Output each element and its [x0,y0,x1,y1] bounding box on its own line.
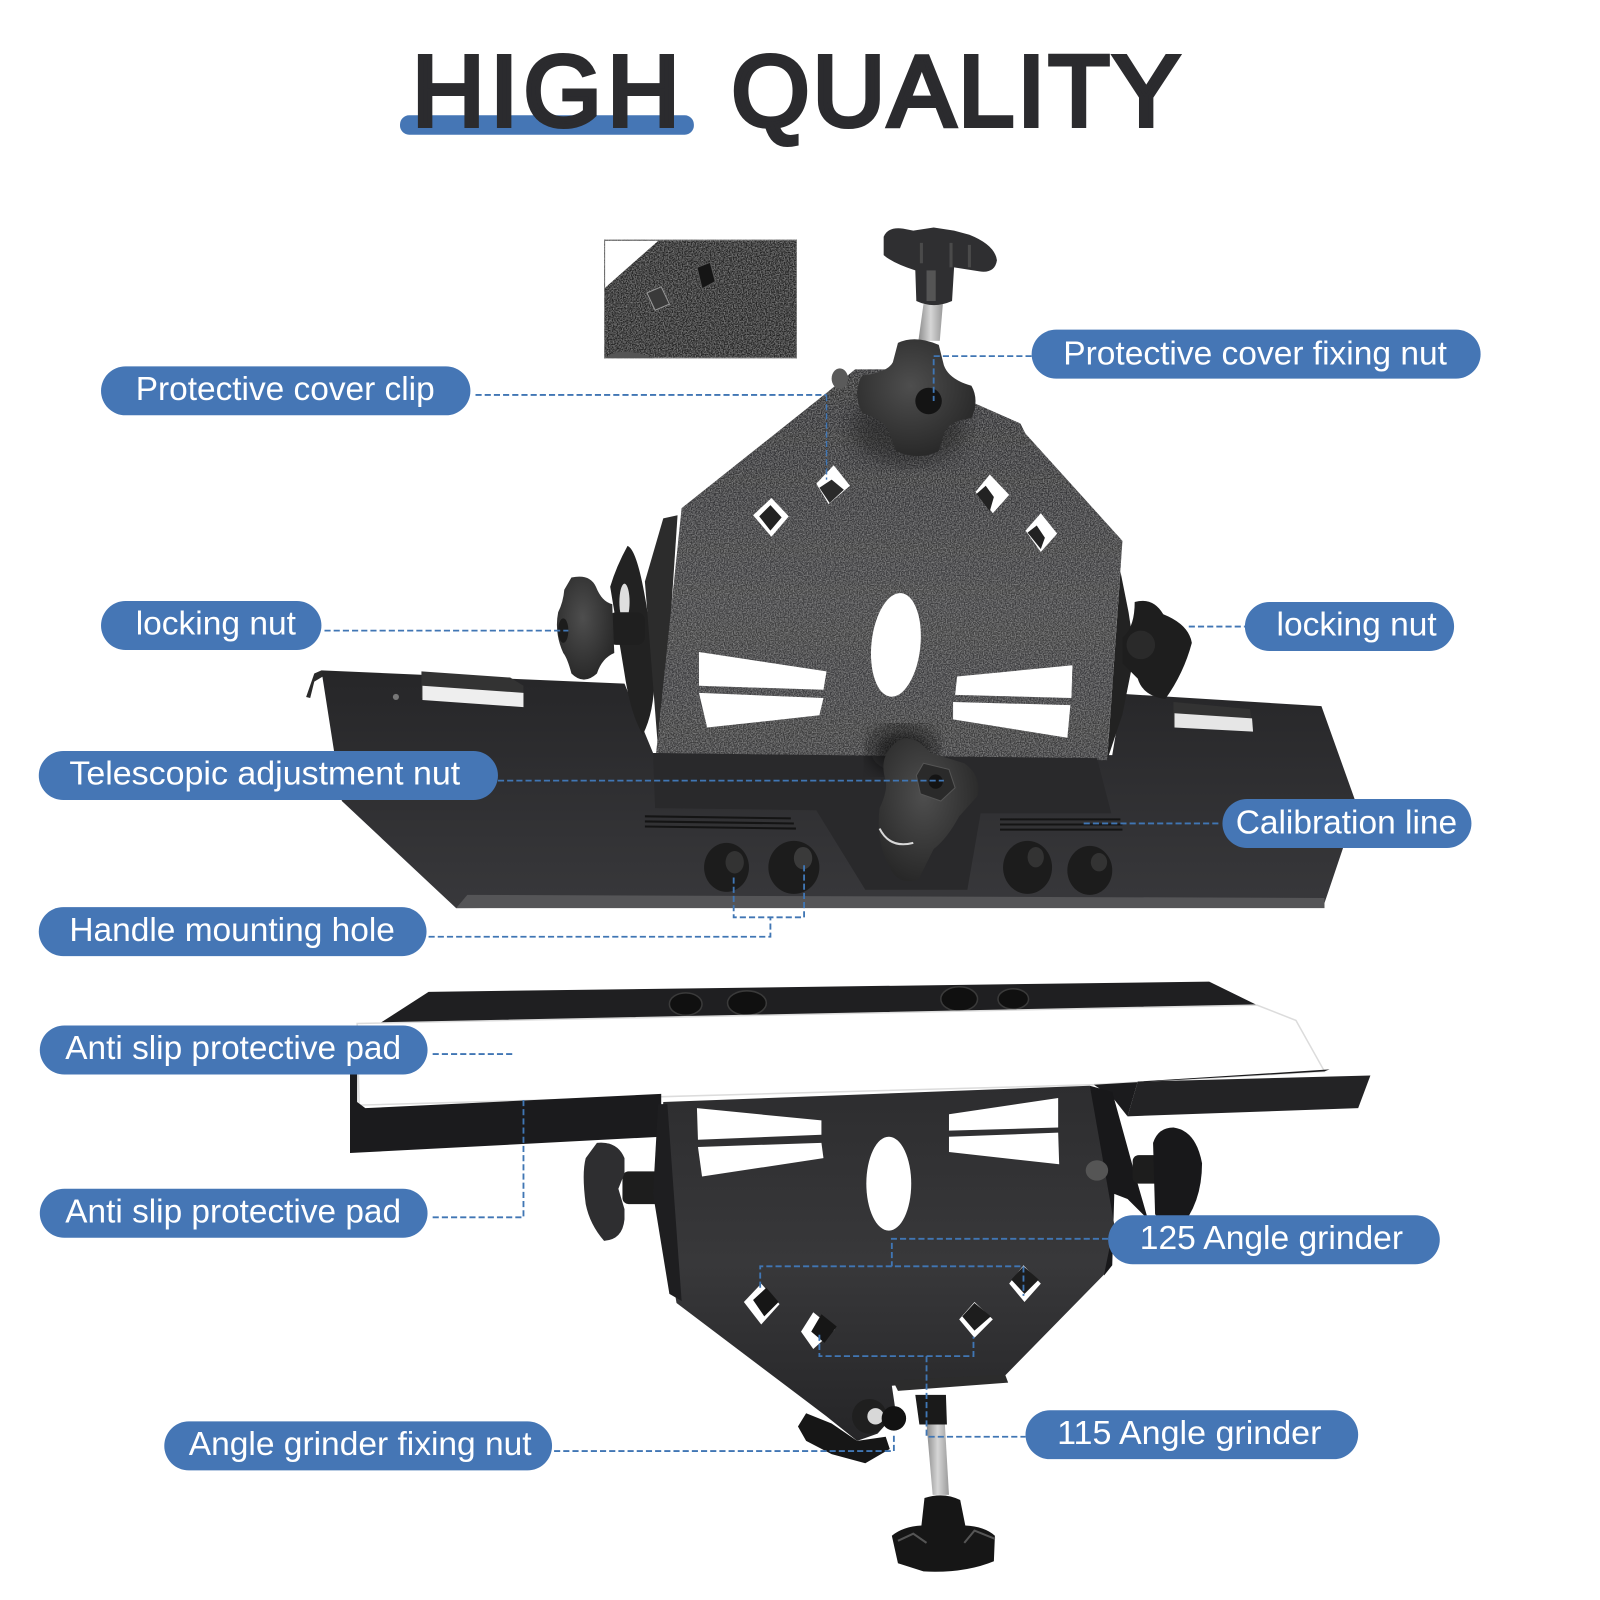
right side bracket [1107,571,1135,760]
leader lines [324,356,1245,1451]
knob: locking right [1122,601,1192,699]
label: Calibration line [1222,799,1471,848]
leader: clip drop [826,395,828,480]
label: Telescopic adjustment nut [39,751,498,800]
lower plate left flange [653,1104,682,1301]
shadow under top knob [852,393,964,464]
bottom lip bar [893,1374,1008,1391]
leader: calibration line [1084,822,1221,824]
calibration lines [645,816,1122,830]
product: lower view assembly [350,982,1370,1572]
label: 115 Angle grinder: 115 Angle grinder [1057,1415,1321,1452]
leader: anti slip pad lower [433,1100,523,1217]
label: 115 Angle grinder [1026,1410,1358,1459]
top screw shaft [918,304,943,341]
knob: angle grinder fixing [798,1399,906,1463]
label: 125 Angle grinder [1108,1215,1440,1264]
handle bolts [704,841,1112,895]
leader: protective cover fixing nut [934,356,1032,401]
knob: locking left [557,577,645,680]
plate slots [699,591,1072,738]
title [400,36,1180,148]
label: Anti slip protective pad upper [40,1026,428,1074]
leader: angle grinder fixing nut [554,1434,894,1451]
label: locking nut left: locking nut [136,606,297,643]
knob: top T-handle [884,228,997,305]
base tray [306,670,1357,908]
title underline bar [400,115,694,135]
leader: locking nut left [324,630,568,632]
tray edge left [350,1061,661,1153]
product: upper view assembly [306,228,1357,908]
tray back band [380,982,1257,1023]
label: locking nut right: locking nut [1277,607,1437,644]
lower plate clip holes [744,1265,1041,1349]
right bolt [1086,1160,1108,1181]
label: Protective cover fixing nut [1032,330,1481,379]
leader: handle mounting hole [429,862,804,937]
mounting plate [656,369,1122,760]
small peg [832,368,848,389]
slider plate [653,753,1111,890]
label: Protective cover clip [101,366,470,415]
lower plate slots [697,1098,1059,1231]
plate clip holes [753,465,1057,552]
label: Angle grinder fixing nut [164,1421,552,1470]
label: locking nut right [1245,602,1454,651]
label: Anti slip protective pad upper: Anti slip protective pad [65,1030,401,1067]
label: Anti slip protective pad lower: Anti slip protective pad [65,1193,401,1230]
left side bracket [610,515,678,750]
leader: 125 angle grinder [760,1239,1108,1296]
tray lip right [1128,1076,1370,1116]
right bracket [1090,1086,1148,1276]
label: Handle mounting hole [39,907,427,956]
label: Telescopic adjustment nut: Telescopic adjustment nut [69,756,461,793]
leader: telescopic adjustment nut [498,780,944,782]
lower screw collar [915,1395,947,1424]
label: locking nut left [101,601,321,650]
leader: locking nut right [1189,626,1245,628]
label: Protective cover clip: Protective cover clip [136,371,435,408]
title word: HIGH: HIGH [412,36,680,148]
right knob [1133,1128,1202,1230]
title word: QUALITY: QUALITY [732,36,1180,148]
label: 125 Angle grinder: 125 Angle grinder [1140,1220,1403,1257]
leader: anti slip pad upper [433,1053,513,1055]
rivets [669,987,1029,1015]
label: Protective cover fixing nut: Protective cover fixing nut [1063,335,1448,372]
label: Angle grinder fixing nut: Angle grinder fixing nut [189,1426,532,1463]
knob: telescopic adjustment [870,728,978,881]
left bolt and knob [584,1143,714,1241]
tray edge right [1094,1069,1330,1116]
lower plate [658,1086,1114,1441]
lower T-handle knob [892,1495,995,1572]
label: Anti slip protective pad lower [40,1189,428,1238]
label: Calibration line: Calibration line [1236,805,1457,842]
label: Handle mounting hole: Handle mounting hole [69,912,395,949]
knob: cross fixing nut [857,339,976,456]
lower screw thread [927,1424,949,1495]
leader: protective cover clip [476,394,827,396]
leader: 115 angle grinder [819,1335,1026,1437]
inset: clip detail photo [604,240,797,358]
anti slip pad [357,1005,1324,1105]
